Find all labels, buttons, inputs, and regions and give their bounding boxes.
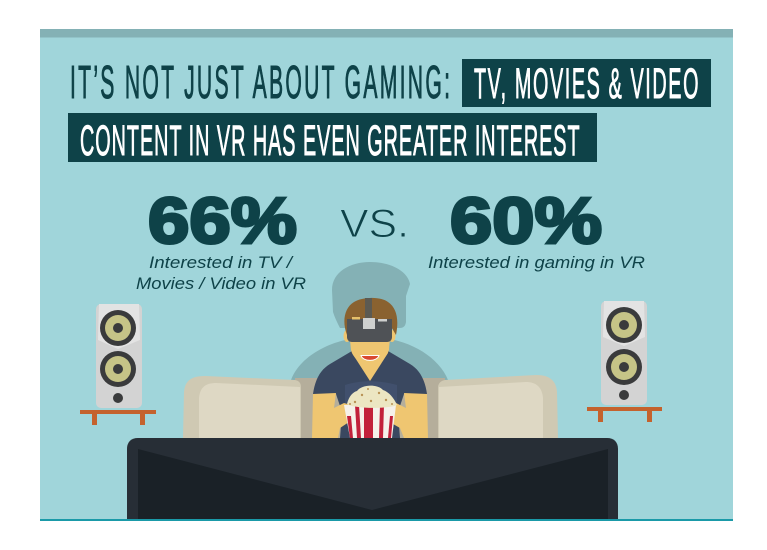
caption: TV and video interest (136, 254, 306, 293)
caption: gaming interest: Interested in gaming in VR (428, 254, 645, 272)
shirt (313, 351, 427, 438)
right speaker (601, 301, 647, 405)
caption: TV and video interest: Interested in TV / (149, 254, 294, 272)
right shelf (587, 407, 662, 422)
statistic: 66 percent: 66% (148, 184, 297, 257)
bottom line (40, 519, 733, 521)
left speaker (96, 304, 142, 408)
shirt front highlight (345, 381, 397, 405)
headset strap (365, 298, 372, 318)
top band (40, 29, 733, 38)
hair (344, 298, 397, 335)
statistic: 60 percent: 60% (450, 184, 602, 257)
smile (361, 356, 379, 360)
sofa (183, 375, 558, 440)
neck and chest (350, 340, 390, 381)
popcorn (347, 386, 397, 408)
headset camera (363, 318, 375, 329)
title highlight: TV, movies and video: TV, MOVIES & VIDEO (474, 61, 698, 108)
caption: TV and video interest: Movies / Video in VR (136, 275, 306, 293)
title highlight: content in VR: CONTENT IN VR HAS EVEN GREATER INTEREST (80, 118, 580, 165)
arms (312, 393, 354, 438)
eye glints (352, 317, 360, 320)
face (349, 330, 390, 366)
person with VR headset (312, 298, 428, 438)
popcorn bucket (344, 405, 396, 438)
television (127, 438, 618, 519)
title line 1: IT’S NOT JUST ABOUT GAMING: (70, 57, 450, 108)
headset goggles (347, 319, 392, 342)
versus label: VS. (340, 202, 409, 246)
ears (344, 330, 396, 342)
person shadow (291, 262, 448, 380)
left shelf (80, 410, 156, 425)
